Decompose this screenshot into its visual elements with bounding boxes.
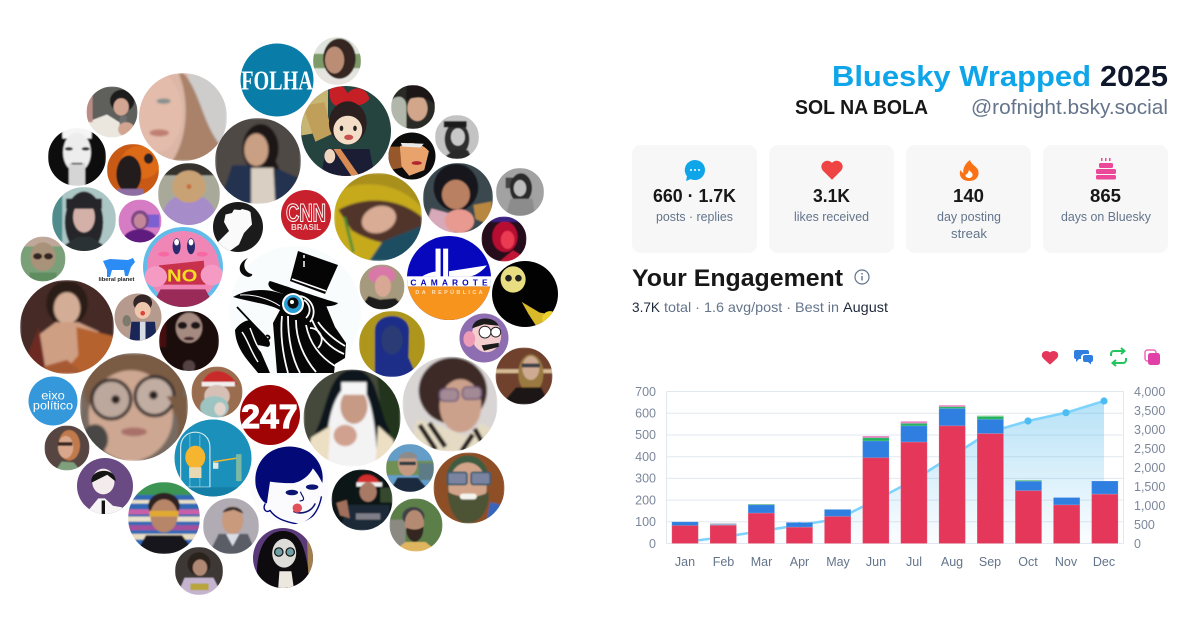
- avatar: Santa hat man: [332, 470, 392, 530]
- logo: liberal planet: [98, 258, 135, 283]
- left axis labels: 100: [635, 515, 656, 529]
- avatar: bearded man with glasses: [434, 452, 504, 524]
- cumulative area: [685, 401, 1104, 544]
- avatar: eixo político logo: político: [33, 399, 74, 412]
- month labels: Jun: [866, 555, 886, 569]
- avatar: purple room selfie: [118, 200, 162, 242]
- panel: days on Bluesky: [1043, 145, 1168, 253]
- label: days: days on Bluesky: [1061, 210, 1152, 224]
- avatar: painted skull woman: [159, 311, 219, 372]
- avatar: red-lit woman: [482, 216, 526, 262]
- avatar: line drawing boy: [77, 458, 133, 514]
- icon: info: [855, 270, 869, 284]
- heading: Your Engagement: Your Engagement: [632, 265, 843, 292]
- icon: legend heart: [1042, 351, 1058, 364]
- right axis labels: 1,000: [1134, 499, 1165, 513]
- left axis labels: 0: [649, 537, 656, 551]
- right axis labels: 3,000: [1134, 423, 1165, 437]
- avatar: Folha logo: [240, 44, 314, 116]
- icon: chat bubble: [685, 160, 705, 181]
- month labels: Dec: [1093, 555, 1115, 569]
- panel: avatar cloud: [20, 37, 558, 595]
- avatar: light bulb in cage: [174, 420, 252, 496]
- avatar: raven in top hat: [229, 246, 361, 378]
- avatar: man at lake: [386, 444, 434, 492]
- right axis labels: 3,500: [1134, 404, 1165, 418]
- avatar: CNN Brasil logo: BRASIL: [291, 223, 321, 232]
- right axis labels: 4,000: [1134, 385, 1165, 399]
- avatar: cartoon boy with cat: [114, 294, 162, 340]
- avatar: eixo político logo: [28, 376, 78, 426]
- chart: monthly engagement: [635, 385, 1165, 569]
- label: streak: day posting: [937, 210, 1001, 224]
- avatar: comic woman: [388, 132, 436, 180]
- right axis labels: 0: [1134, 537, 1141, 551]
- month labels: May: [826, 555, 851, 569]
- month labels: Jul: [906, 555, 922, 569]
- avatar: goth cartoon girl: [253, 528, 313, 588]
- avatar: woman with glasses and lights: [496, 348, 552, 404]
- right axis labels: 2,000: [1134, 461, 1165, 475]
- avatar: curly hair small portrait: [175, 547, 223, 595]
- display name: SOL NA BOLA: [795, 97, 928, 119]
- avatar: Christmas hamster: [192, 366, 242, 419]
- left axis labels: 600: [635, 406, 656, 420]
- month labels: Oct: [1018, 555, 1038, 569]
- avatar: smiling man in sweater: [203, 498, 259, 554]
- title: Bluesky Wrapped: [832, 61, 1091, 93]
- label: likes: likes received: [794, 210, 869, 224]
- avatar: woman in blazer: [215, 118, 301, 204]
- right axis labels: 2,500: [1134, 442, 1165, 456]
- avatar: curly woman purple glasses: [402, 356, 498, 452]
- label: posts and replies: posts · replies: [656, 210, 733, 224]
- engagement summary: 3.7K: [632, 299, 661, 315]
- engagement summary: [632, 299, 888, 315]
- label: streak: [937, 210, 1001, 241]
- avatar: woman with plush toy: [423, 163, 493, 233]
- avatar: woman with bangs: [52, 187, 116, 253]
- left axis labels: 200: [635, 494, 656, 508]
- month labels: Aug: [941, 555, 963, 569]
- handle: @rofnight.bsky.social: [971, 96, 1168, 119]
- avatar: painted woman: [20, 280, 114, 374]
- month labels: Mar: [751, 555, 772, 569]
- right axis labels: 500: [1134, 518, 1155, 532]
- avatar: Kirby with NO sign: [143, 227, 223, 307]
- avatar: raised fist: [213, 202, 263, 253]
- avatar: CNN Brasil logo: CNN: [286, 200, 326, 228]
- avatar: woman with big glasses: [80, 353, 188, 461]
- grid: [666, 392, 1124, 544]
- avatar: smoking nun: [304, 370, 400, 466]
- icon: legend replies: [1074, 350, 1093, 364]
- legend icons: [1042, 348, 1160, 366]
- left axis labels: [635, 385, 656, 551]
- avatar: black and white curly woman: [496, 168, 544, 216]
- icon: cake: [1096, 158, 1116, 180]
- stacked bars: [672, 405, 1118, 544]
- avatar: Kirby with NO sign: NO: [167, 265, 197, 285]
- left axis labels: 500: [635, 428, 656, 442]
- avatar: cartoon man with moustache: [460, 314, 508, 362]
- month labels: [675, 555, 1115, 569]
- avatar: Camarote da República logo: DA REPÚBLICA: [415, 289, 483, 296]
- avatar: Kiki with broom: [301, 86, 391, 176]
- left axis labels: 400: [635, 450, 656, 464]
- month labels: Sep: [979, 555, 1001, 569]
- icon: legend quotes: [1145, 350, 1160, 365]
- icon: heart: [822, 161, 842, 179]
- avatar: red-haired woman with glasses: [44, 426, 90, 470]
- cumulative line: [685, 397, 1108, 542]
- avatar: dark-bearded man: [390, 498, 442, 552]
- month labels: Apr: [790, 555, 809, 569]
- month labels: Nov: [1055, 555, 1078, 569]
- avatar: skull trumpet: [492, 261, 558, 327]
- avatar: eixo político logo: eixo: [41, 390, 65, 403]
- title: 2025: [1100, 61, 1168, 93]
- avatar: big woman: [135, 73, 227, 161]
- avatar: pink hair woman: [360, 264, 404, 310]
- panel: likes received: [769, 145, 894, 253]
- icon: legend reposts: [1111, 348, 1126, 366]
- avatar: Folha logo: FOLHA: [241, 65, 313, 96]
- avatar: orange cat: [107, 144, 161, 196]
- left axis labels: 700: [635, 385, 656, 399]
- avatar: blue hair cartoon face: [250, 446, 328, 524]
- icon: flame: [960, 160, 979, 181]
- avatar: purple plush: [158, 163, 220, 225]
- stat: streak: 140: [953, 186, 984, 206]
- panel: day posting streak: [906, 145, 1031, 253]
- avatar: rainbow background person: [128, 482, 200, 554]
- avatar: woman with yellow background: [334, 173, 422, 261]
- avatar: black and white woman: [48, 128, 106, 186]
- stat: days: 865: [1090, 186, 1121, 206]
- month labels: Feb: [713, 555, 734, 569]
- stat: posts and replies: 660 · 1.7K: [653, 186, 736, 206]
- label: streak: streak: [951, 227, 988, 241]
- logo: liberal planet: liberal planet: [98, 277, 135, 283]
- left axis labels: 300: [635, 472, 656, 486]
- engagement summary: August: [843, 299, 888, 315]
- right axis labels: [1134, 385, 1165, 551]
- month labels: Jan: [675, 555, 695, 569]
- avatar: Camarote da República logo: [407, 236, 491, 320]
- avatar: black and white hat woman: [435, 115, 479, 159]
- avatar: white streak hair woman: [391, 85, 435, 129]
- avatar: Brasil 247 logo: 247: [241, 399, 298, 436]
- avatar: Brasil 247 logo: [240, 385, 300, 445]
- right axis labels: 1,500: [1134, 480, 1165, 494]
- panel: posts and replies: [632, 145, 757, 253]
- avatar: blue nun figure: [359, 311, 425, 377]
- avatar: CNN Brasil logo: [281, 190, 331, 240]
- avatar: mirror selfie: [86, 86, 138, 138]
- avatar: long-haired man: [313, 37, 361, 85]
- avatar: Camarote da República logo: CAMAROTE: [410, 278, 488, 288]
- engagement summary: total · 1.6 avg/post · Best in: [664, 299, 839, 315]
- avatar: alien mask: [20, 236, 66, 282]
- stat: likes: 3.1K: [813, 186, 850, 206]
